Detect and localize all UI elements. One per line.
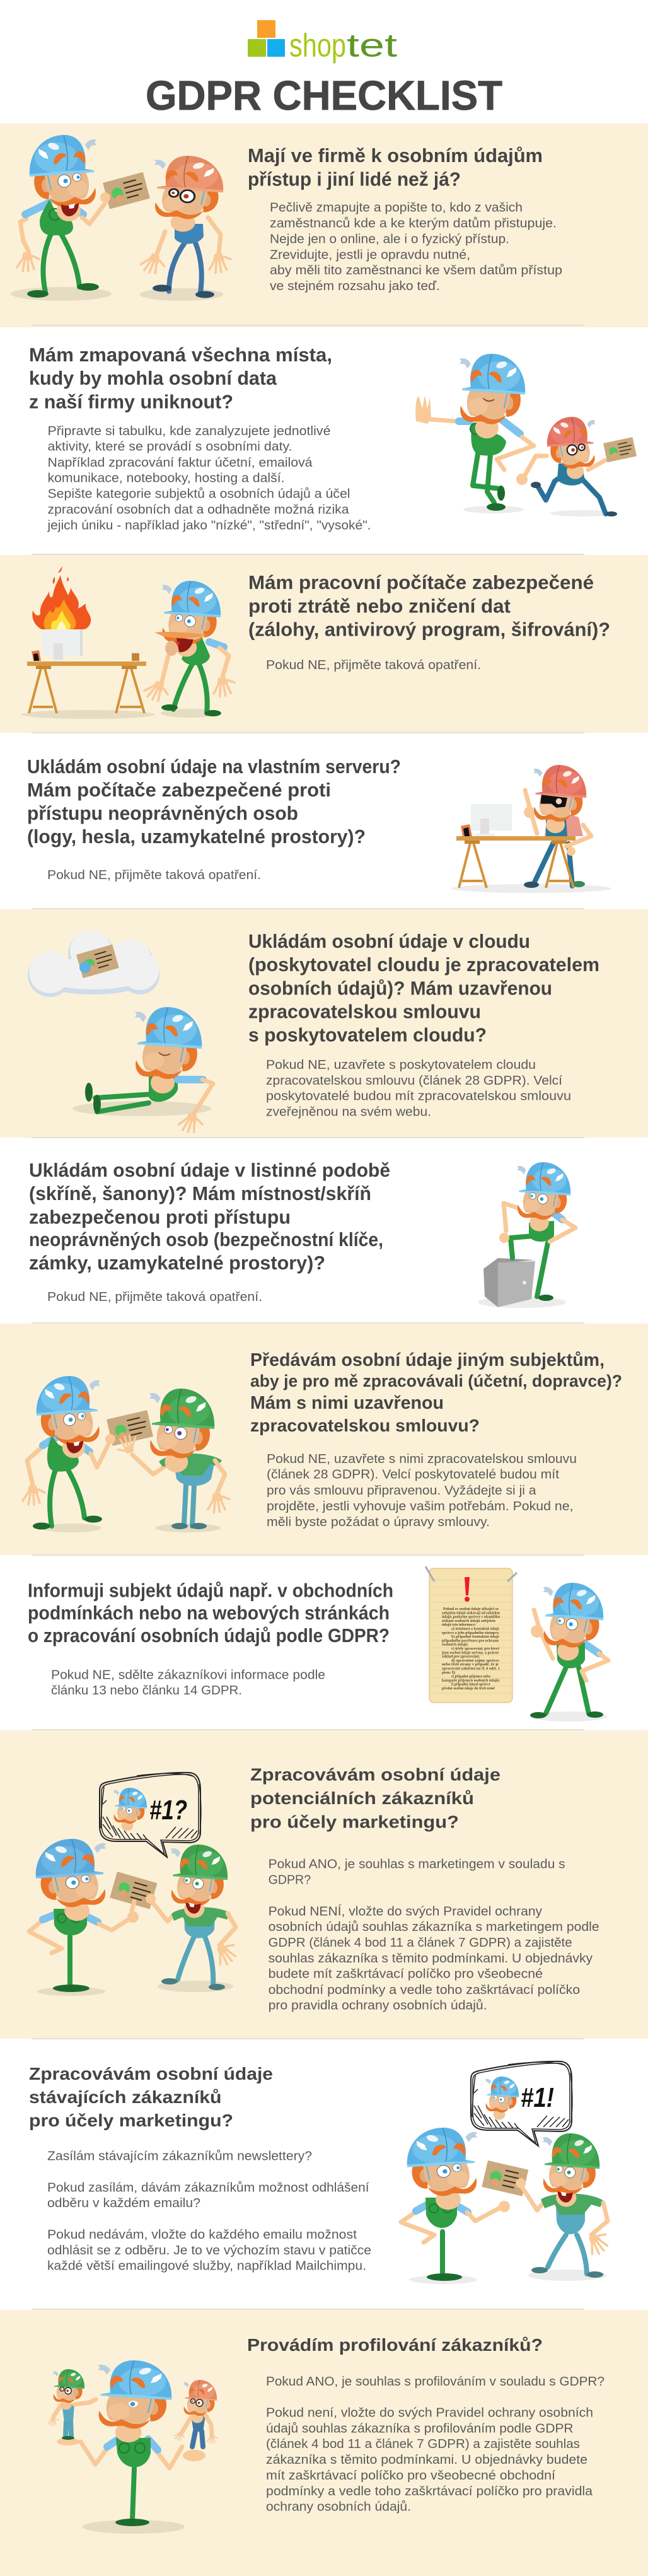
body text: každé větší emailingové služby, například Mailchimpu. — [47, 2259, 366, 2273]
body text: komunikace, notebooky, hosting a další. — [48, 472, 285, 486]
body text: zveřejněnou na svém webu. — [266, 1105, 431, 1119]
illustration: nailed paper notice: b) případné kontaktní údaje — [451, 1635, 499, 1639]
heading: z naší firmy uniknout? — [29, 391, 233, 412]
heading: Předávám osobní údaje jiným subjektům, — [250, 1350, 605, 1370]
logo wordmark tet: tet — [347, 28, 398, 64]
mini head in bubble — [485, 2077, 519, 2120]
heading: (poskytovatel cloudu je zpracovatelem — [248, 953, 599, 976]
heading: (skříně, šanony)? Mám místnost/skříň — [29, 1182, 371, 1204]
character: orange helmet with glasses — [139, 156, 232, 301]
heading — [29, 344, 332, 412]
heading — [28, 1580, 393, 1646]
icon: green square — [248, 39, 266, 57]
panel: existing customers marketing — [29, 2061, 613, 2284]
body text: Pokud není, vložte do svých Pravidel ochrany osobních — [266, 2406, 593, 2420]
body text: odhlásit se z odběru. Je to ve výchozím stavu v patičce — [47, 2244, 371, 2258]
body text: zpracovatelskou smlouvu (článek 28 GDPR). Velcí — [266, 1074, 562, 1088]
heading: přístupu neoprávněných osob — [27, 802, 298, 824]
panel: own server — [27, 755, 611, 893]
body text — [269, 1858, 599, 2013]
panel: fire and computers — [0, 555, 648, 733]
heading: zámky, uzamykatelné prostory)? — [29, 1252, 325, 1274]
illustration: nailed paper notice: údajů tyto informace: — [442, 1623, 476, 1627]
body text: zaměstnanců kde a ke kterým datům přistupuje. — [270, 217, 557, 231]
speech bubble: #1! — [471, 2061, 572, 2146]
body text: Pokud NE, sdělte zákazníkovi informace podle — [51, 1669, 325, 1682]
heading: Mám pracovní počítače zabezpečené — [248, 571, 594, 593]
illustration: man standing on safe — [478, 1162, 576, 1308]
icon: blue square — [267, 39, 285, 57]
illustration: nailed paper notice: c) účely zpracování, pro které — [451, 1646, 499, 1651]
illustration: nailed paper notice: osobních údajů; — [442, 1643, 468, 1647]
body text: mít zaškrtávací políčko pro všeobecné obchodní — [266, 2469, 555, 2483]
character: green helmet — [115, 1389, 230, 1532]
body text: projděte, jestli vyhovuje vašim potřebám. Pokud ne, — [267, 1500, 574, 1513]
illustration: nailed paper notice: písm. f); — [442, 1670, 456, 1675]
character: blue helmet with card — [23, 1376, 153, 1532]
heading: Mám počítače zabezpečené proti — [27, 779, 331, 801]
logo wordmark shop: shop — [289, 28, 346, 64]
heading: zpracovatelskou smlouvu — [248, 1001, 481, 1023]
heading: kudy by mohla osobní data — [29, 367, 277, 389]
body text: Pokud ANO, je souhlas s profilováním v souladu s GDPR? — [266, 2375, 605, 2389]
body text: jejich úniku - například jako "nízké", "střední", "vysoké". — [47, 519, 371, 533]
character: running orange helmet — [516, 417, 637, 516]
body text: budete mít zaškrtávací políčko pro všeobecné — [269, 1967, 543, 1981]
illustration: nailed paper notice: základ pro zpracování; — [442, 1655, 480, 1659]
illustration: nailed paper notice: kategorie příjemců osobních údajů; — [442, 1678, 500, 1682]
panel background — [0, 555, 648, 733]
illustration: nailed paper notice: a) totožnost a kontaktní údaje — [451, 1627, 499, 1631]
body text: zpracování osobních dat a odhadněte možná rizika — [48, 503, 349, 516]
character: blue helmet with card — [11, 135, 150, 301]
character: blue helmet juggling small men — [57, 2360, 205, 2534]
panel background — [0, 124, 648, 327]
body text: podmínky a vedle toho zaškrtávací políčko pro pravidla — [266, 2485, 593, 2498]
heading: pro účely marketingu? — [250, 1812, 459, 1832]
body text: souhlas zákazníka s těmito podmínkami. U objednávky — [269, 1952, 593, 1966]
character: blue helmet pointing — [530, 1583, 608, 1722]
heading: Zpracovávám osobní údaje — [250, 1764, 500, 1785]
body text: odběru v každém emailu? — [47, 2196, 200, 2210]
heading: Mám s nimi uzavřenou — [250, 1393, 444, 1413]
heading — [29, 1159, 390, 1274]
body text: Pokud NE, uzavřete s nimi zpracovatelskou smlouvu — [267, 1452, 577, 1466]
character: sitting blue helmet — [72, 1007, 213, 1136]
body text: aktivity, které se provádí s osobními daty. — [48, 440, 292, 454]
panel: leak points — [29, 344, 637, 533]
body text: Připravte si tabulku, kde zanalyzujete jednotlivé — [48, 424, 330, 438]
body text: Pokud NE, uzavřete s poskytovatelem cloudu — [266, 1058, 536, 1072]
heading: Ukládám osobní údaje v cloudu — [248, 930, 530, 952]
body text: Pokud NE, přijměte taková opatření. — [47, 868, 261, 882]
title: GDPR CHECKLIST — [146, 72, 502, 119]
heading: zabezpečenou proti přístupu — [29, 1206, 291, 1228]
body text: pro vás smlouvu připravenou. Vyžádejte si ji a — [267, 1484, 536, 1498]
heading: Zpracovávám osobní údaje — [29, 2064, 273, 2084]
heading: proti ztrátě nebo zničení dat — [248, 595, 511, 617]
panel: cloud — [0, 909, 648, 1138]
body text: Zasílám stávajícím zákazníkům newslettery? — [47, 2150, 312, 2164]
mini head in bubble — [113, 1788, 147, 1831]
illustration: nailed paper notice: případného pověřence pro ochranu — [442, 1638, 499, 1643]
bubble text: #1? — [149, 1795, 187, 1826]
body text: Sepište kategorie subjektů a osobních údajů a účel — [48, 487, 350, 501]
body text: aby měli tito zaměstnanci ke všem datům přístup — [270, 264, 562, 277]
heading: pro účely marketingu? — [29, 2111, 233, 2130]
heading: potenciálních zákazníků — [250, 1788, 474, 1808]
body text: Pokud nedávám, vložte do každého emailu možnost — [47, 2228, 357, 2242]
heading — [248, 930, 599, 1046]
body text — [266, 2375, 605, 2514]
icon: orange square — [257, 20, 275, 38]
bubble text: #1! — [521, 2082, 554, 2113]
heading: Mají ve firmě k osobním údajům — [248, 144, 543, 166]
panel: who has access — [0, 124, 648, 327]
heading — [250, 1764, 500, 1832]
body text: článku 13 nebo článku 14 GDPR. — [51, 1684, 242, 1698]
panel: profiling — [0, 2310, 648, 2576]
heading: aby je pro mě zpracovávali (účetní, dopravce)? — [250, 1372, 622, 1390]
illustration: nailed paper notice: subjektu údajů získávají od subjektu — [442, 1611, 500, 1615]
body text: ve stejném rozsahu jako teď. — [270, 279, 440, 293]
illustration: masked man at desk — [451, 765, 611, 893]
panel background — [0, 1730, 648, 2039]
panel background — [0, 909, 648, 1138]
panel: informing data subjects — [28, 1566, 608, 1722]
character: blue helmet thumbs up — [29, 1839, 157, 1996]
illustration: cloud with card — [28, 930, 159, 997]
illustration: burning desk — [21, 566, 155, 719]
character: blue helmet stop gesture — [415, 354, 534, 513]
body text — [266, 1058, 571, 1119]
heading — [29, 2064, 273, 2130]
body text: Nejde jen o online, ale i o fyzický přístup. — [270, 232, 509, 246]
illustration: nailed paper notice: zpracování založeno na čl. 6 odst. 1 — [442, 1666, 500, 1671]
body text: obchodní podmínky a vedle toho zaškrtávací políčko — [269, 1983, 580, 1997]
body text: GDPR (článek 4 bod 11 a článek 7 GDPR) a zajistěte — [269, 1936, 572, 1950]
heading: podmínkách nebo na webových stránkách — [28, 1602, 390, 1624]
illustration: nailed paper notice: údajů, poskytne správce v okamžiku — [442, 1615, 500, 1619]
body text: údajů souhlas zákazníka s profilováním podle GDPR — [266, 2422, 574, 2435]
body text: Pokud NE, přijměte taková opatření. — [266, 658, 481, 672]
character: blue helmet thumbs up — [401, 2128, 528, 2284]
logo: shoptet — [248, 20, 398, 64]
panel: third party processors — [0, 1324, 648, 1555]
body text: Pokud ANO, je souhlas s marketingem v souladu s — [269, 1858, 565, 1872]
panel background — [0, 2310, 648, 2576]
body text: ochrany osobních údajů. — [266, 2500, 411, 2514]
body text: Pokud zasílám, dávám zákazníkům možnost odhlášení — [47, 2181, 369, 2194]
body text — [47, 2150, 371, 2273]
character: small orange helmet — [173, 2380, 217, 2447]
body text: zákazníka s těmito podmínkami. U objednávky budete — [266, 2453, 587, 2467]
heading: přístup i jiní lidé než já? — [248, 168, 461, 190]
illustration: nailed paper notice: d) oprávněné zájmy správce — [451, 1658, 499, 1663]
heading: (zálohy, antivirový program, šifrování)? — [248, 619, 610, 641]
heading: zpracovatelskou smlouvu? — [250, 1416, 480, 1435]
heading: osobních údajů)? Mám uzavřenou — [248, 977, 552, 999]
illustration: nailed paper notice: nebo třetí strany v případě, že je — [442, 1662, 499, 1667]
heading — [27, 755, 401, 848]
illustration: nailed paper notice: f) případný úmysl správce — [451, 1682, 490, 1687]
body text — [51, 1669, 325, 1698]
heading — [248, 571, 610, 641]
illustration: nailed paper notice: e) případné příjemce nebo — [451, 1674, 490, 1679]
heading: Mám zmapovaná všechna místa, — [29, 344, 332, 366]
body text: Například zpracování faktur účetní, emailová — [48, 456, 313, 470]
heading: (logy, hesla, uzamykatelné prostory)? — [27, 825, 366, 848]
illustration: nailed paper notice: předat osobní údaje do třetí země — [442, 1686, 495, 1691]
body text: osobních údajů souhlas zákazníka s marketingem podle — [269, 1920, 599, 1934]
body text: měli byste požádat o úpravy smlouvy. — [267, 1515, 490, 1529]
heading: stávajících zákazníků — [29, 2087, 222, 2107]
character: green helmet with open mouth — [516, 2133, 613, 2281]
heading: Informuji subjekt údajů např. v obchodních — [28, 1580, 393, 1602]
heading: Provádím profilování zákazníků? — [247, 2335, 543, 2355]
illustration: nailed paper notice: správce a jeho případného zástupce; — [442, 1631, 499, 1635]
heading — [250, 1350, 622, 1435]
speech bubble: #1? — [100, 1773, 201, 1857]
body text — [47, 424, 371, 533]
panel: prospects marketing — [0, 1730, 648, 2039]
panel: paper documents — [29, 1159, 576, 1308]
body text: Pokud NE, přijměte taková opatření. — [47, 1290, 262, 1304]
body text: pro pravidla ochrany osobních údajů. — [269, 1999, 487, 2013]
character: small green helmet — [49, 2369, 96, 2440]
character: shocked blue helmet — [142, 581, 236, 718]
heading: s poskytovatelem cloudu? — [248, 1024, 487, 1046]
heading: o zpracování osobních údajů podle GDPR? — [28, 1624, 390, 1646]
body text: Pečlivě zmapujte a popište to, kdo z vašich — [270, 201, 523, 215]
body text: GDPR? — [269, 1873, 311, 1887]
heading: Ukládám osobní údaje na vlastním serveru? — [27, 755, 401, 778]
body text — [270, 201, 562, 293]
body text: (článek 28 GDPR). Velcí poskytovatelé budou mít — [267, 1468, 559, 1482]
illustration: nailed paper notice: jsou osobní údaje určeny, a právní — [441, 1650, 499, 1655]
body text: (článek 4 bod 11 a článek 7 GDPR) a zajistěte souhlas — [266, 2437, 580, 2451]
character: green helmet with open mouth — [146, 1845, 241, 1992]
illustration: nailed paper notice: získání osobních údajů subjektu — [442, 1619, 496, 1623]
body text: Pokud NENÍ, vložte do svých Pravidel ochrany — [269, 1904, 542, 1918]
panel background — [0, 1324, 648, 1555]
heading: Ukládám osobní údaje v listinné podobě — [29, 1159, 390, 1181]
body text: poskytovatelé budou mít zpracovatelskou smlouvu — [266, 1090, 571, 1104]
body text: Zrevidujte, jestli je opravdu nutné, — [270, 248, 470, 262]
heading: neoprávněných osob (bezpečnostní klíče, — [29, 1228, 383, 1250]
illustration: nailed paper notice: Pokud se osobní údaje týkající se — [443, 1607, 499, 1611]
heading — [248, 144, 543, 190]
body text — [267, 1452, 577, 1529]
illustration: nailed paper notice — [425, 1566, 517, 1703]
